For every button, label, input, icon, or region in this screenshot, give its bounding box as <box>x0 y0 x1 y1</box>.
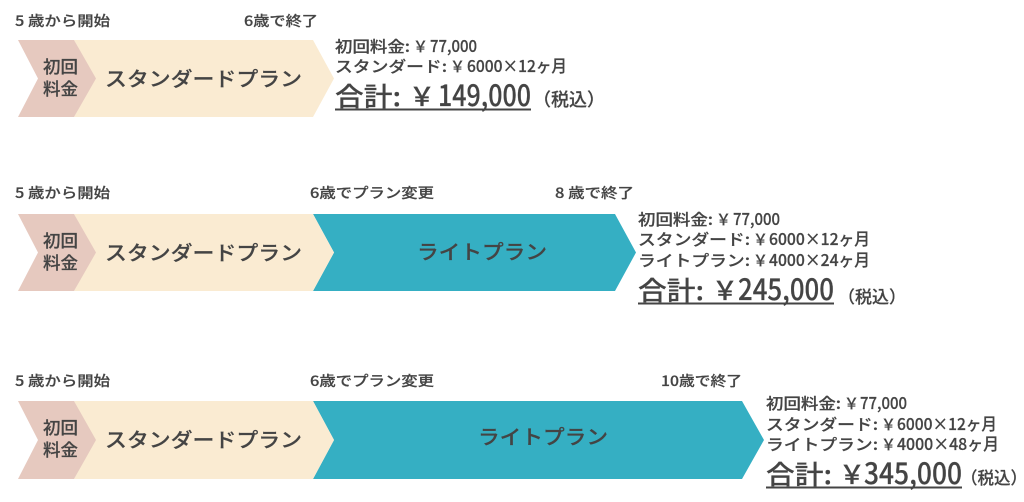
cost breakdown: （税込） <box>533 86 605 112</box>
end age label: 8 歳で終了 <box>555 183 634 203</box>
cost breakdown: ￥ <box>413 35 428 57</box>
cost breakdown: 77,000 <box>860 390 907 414</box>
cost breakdown: ￥ <box>844 392 859 414</box>
cost breakdown: 合計: <box>335 77 401 114</box>
arrow: initial fee <box>18 214 96 291</box>
arrow: initial fee <box>18 40 96 117</box>
arrow: standard plan <box>74 40 334 117</box>
arrow: standard plan: スタンダードプラン <box>105 237 302 266</box>
arrow: initial fee <box>18 401 96 479</box>
cost breakdown: 初回料金: <box>335 35 410 57</box>
cost breakdown: 合計: <box>766 455 832 492</box>
arrow: standard plan: スタンダードプラン <box>105 63 302 92</box>
arrow: standard plan <box>74 401 334 479</box>
cost breakdown: ￥ <box>881 433 896 455</box>
cost breakdown: 77,000 <box>733 206 780 230</box>
cost breakdown: 245,000 <box>738 267 834 309</box>
arrow: initial fee: 料金 <box>43 436 78 461</box>
arrow: initial fee: 料金 <box>43 75 78 100</box>
cost breakdown: スタンダード: <box>638 228 750 250</box>
cost breakdown: 6000×12ヶ月 <box>769 226 870 250</box>
cost breakdown: ライトプラン: <box>766 433 878 455</box>
arrow: light plan <box>313 214 636 291</box>
cost breakdown: ￥ <box>753 249 768 271</box>
cost breakdown: ￥ <box>881 413 896 435</box>
arrow: initial fee: 料金 <box>43 249 78 274</box>
plan row 2: change to light plan at 6, end at 8 <box>15 183 906 309</box>
arrow: initial fee: 初回 <box>43 414 78 439</box>
plan change label: 6歳でプラン変更 <box>310 183 434 203</box>
arrow: standard plan <box>74 214 334 291</box>
start age label: 5 歳から開始 <box>15 371 110 391</box>
cost breakdown: ￥ <box>753 228 768 250</box>
cost breakdown: 345,000 <box>864 451 962 493</box>
cost breakdown <box>766 390 1024 493</box>
cost breakdown: ￥ <box>409 77 435 114</box>
plan row 1: standard plan only <box>15 11 605 117</box>
arrow: light plan: ライトプラン <box>478 421 608 450</box>
cost breakdown: ￥ <box>712 271 738 308</box>
cost breakdown: （税込） <box>838 283 906 308</box>
cost breakdown: 初回料金: <box>766 392 841 414</box>
start age label: 5 歳から開始 <box>15 183 110 203</box>
arrow: initial fee: 初回 <box>43 53 78 78</box>
arrow: light plan: ライトプラン <box>417 236 547 265</box>
arrow: initial fee: 初回 <box>43 227 78 252</box>
arrow: standard plan: スタンダードプラン <box>105 424 302 453</box>
cost breakdown: 4000×24ヶ月 <box>769 247 870 271</box>
cost breakdown <box>335 33 605 115</box>
cost breakdown: ￥ <box>839 455 865 492</box>
end age label: 6歳で終了 <box>244 11 318 31</box>
start age label: 5 歳から開始 <box>15 11 110 31</box>
cost breakdown: 149,000 <box>438 73 531 115</box>
cost breakdown: スタンダード: <box>335 55 447 77</box>
cost breakdown: 6000×12ヶ月 <box>467 53 567 77</box>
cost breakdown: 合計: <box>638 271 704 308</box>
cost breakdown: 6000×12ヶ月 <box>897 411 997 435</box>
cost breakdown <box>638 206 906 309</box>
plan row 3: change to light plan at 6, end at 10 <box>15 371 1024 493</box>
cost breakdown: ライトプラン: <box>638 249 750 271</box>
cost breakdown: ￥ <box>716 208 731 230</box>
end age label: 10歳で終了 <box>661 371 742 391</box>
cost breakdown: ￥ <box>450 55 465 77</box>
cost breakdown: 77,000 <box>430 33 477 57</box>
plan change label: 6歳でプラン変更 <box>310 371 434 391</box>
cost breakdown: 4000×48ヶ月 <box>897 431 999 455</box>
cost breakdown: スタンダード: <box>766 413 878 435</box>
cost breakdown: 初回料金: <box>638 208 713 230</box>
arrow: light plan <box>313 401 764 479</box>
